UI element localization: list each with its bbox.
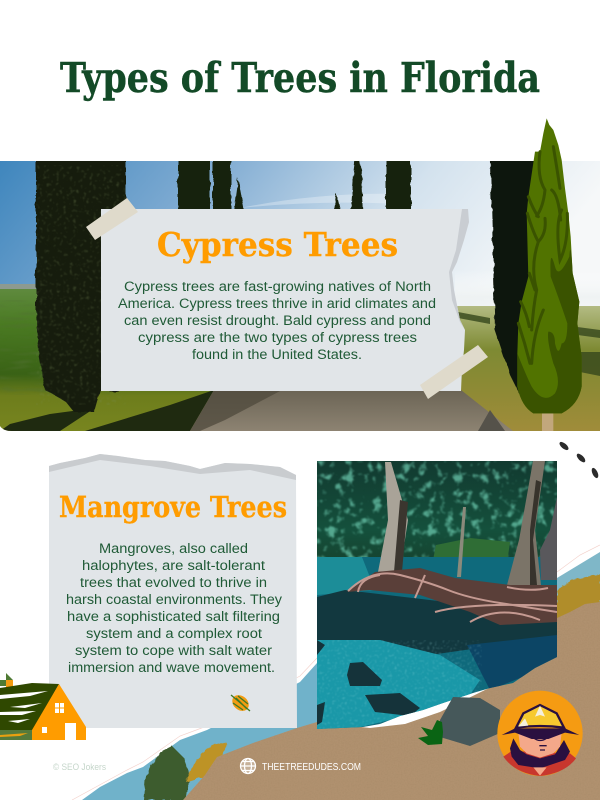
heading: cypress trees: Cypress Trees xyxy=(157,225,398,264)
torn edge shading xyxy=(449,209,469,330)
text block: cypress description: America. Cypress trees thrive in arid climates and xyxy=(118,296,436,312)
landscape strip: right xyxy=(557,545,600,622)
footer copyright: © SEO Jokers xyxy=(53,762,106,773)
card paper xyxy=(49,454,297,728)
illustration: cypress tree xyxy=(517,118,582,431)
icon: globe xyxy=(240,758,256,774)
photo: cypress-lined road xyxy=(0,145,600,431)
tape bottom-right xyxy=(420,345,488,399)
illustration: ants xyxy=(558,440,600,479)
trunk xyxy=(542,412,553,431)
text block: cypress description: can even resist drought. Bald cypress and pond xyxy=(124,313,431,329)
text block: mangrove description: harsh coastal environments. They xyxy=(66,592,283,608)
helmet xyxy=(516,705,564,728)
house wall xyxy=(0,728,33,740)
landscape strip: left xyxy=(72,658,317,800)
ant 2 xyxy=(575,452,587,464)
ant 1 xyxy=(558,440,570,452)
logo: tree dude avatar xyxy=(497,691,583,776)
heading: mangrove trees: Mangrove Trees xyxy=(59,490,287,524)
undergrowth xyxy=(434,538,510,557)
text block: mangrove description: immersion and wave movement. xyxy=(68,660,275,676)
card paper xyxy=(101,209,469,391)
water xyxy=(317,557,557,732)
text block: mangrove description: system to cope with salt water xyxy=(75,643,272,659)
shirt xyxy=(503,751,576,776)
chimney cap xyxy=(6,680,13,687)
text block: mangrove description: trees that evolved to thrive in xyxy=(80,575,267,591)
right trunks xyxy=(507,461,545,585)
photo: mangrove swamp xyxy=(317,461,557,732)
text block: cypress description: cypress are the two types of cypress trees xyxy=(138,330,417,346)
wall streak xyxy=(0,733,28,737)
panel: mangrove card xyxy=(49,454,297,728)
text block: cypress description: found in the United States. xyxy=(192,347,362,363)
collar xyxy=(533,767,547,776)
footer website: THEETREEDUDES.COM xyxy=(262,762,361,773)
root mass xyxy=(347,568,557,625)
text block: cypress description: Cypress trees are fast-growing natives of North xyxy=(124,279,431,295)
thin trunk xyxy=(457,507,466,577)
tape top-left xyxy=(86,198,138,240)
panel: cypress card xyxy=(86,198,488,399)
chimney xyxy=(0,673,13,686)
windows and door xyxy=(42,703,76,740)
foliage silhouette xyxy=(517,118,582,413)
torn edge shading xyxy=(49,454,296,480)
foliage dark branches xyxy=(518,147,567,363)
beard xyxy=(510,738,570,768)
roof highlights xyxy=(0,691,48,723)
icon: beetle xyxy=(229,692,252,714)
hat brim xyxy=(502,728,579,739)
house roof xyxy=(0,683,59,730)
illustration: house xyxy=(0,673,86,740)
left trunk xyxy=(378,462,408,572)
text block: mangrove description: halophytes, are salt-tolerant xyxy=(82,558,265,574)
icon: green leaves xyxy=(418,720,443,745)
ant 3 xyxy=(590,467,600,479)
torn brown paper xyxy=(180,600,600,800)
mouth and nose xyxy=(533,738,547,750)
face xyxy=(518,732,562,758)
helmet detail xyxy=(518,706,545,727)
text block: mangrove description: system and a complex root xyxy=(86,626,262,642)
text block: mangrove description: Mangroves, also called xyxy=(99,541,248,557)
gable xyxy=(32,684,86,740)
icon: rock xyxy=(440,697,500,746)
text block: mangrove description: have a sophisticated salt filtering xyxy=(67,609,280,625)
foliage dark lower flames xyxy=(517,250,582,413)
